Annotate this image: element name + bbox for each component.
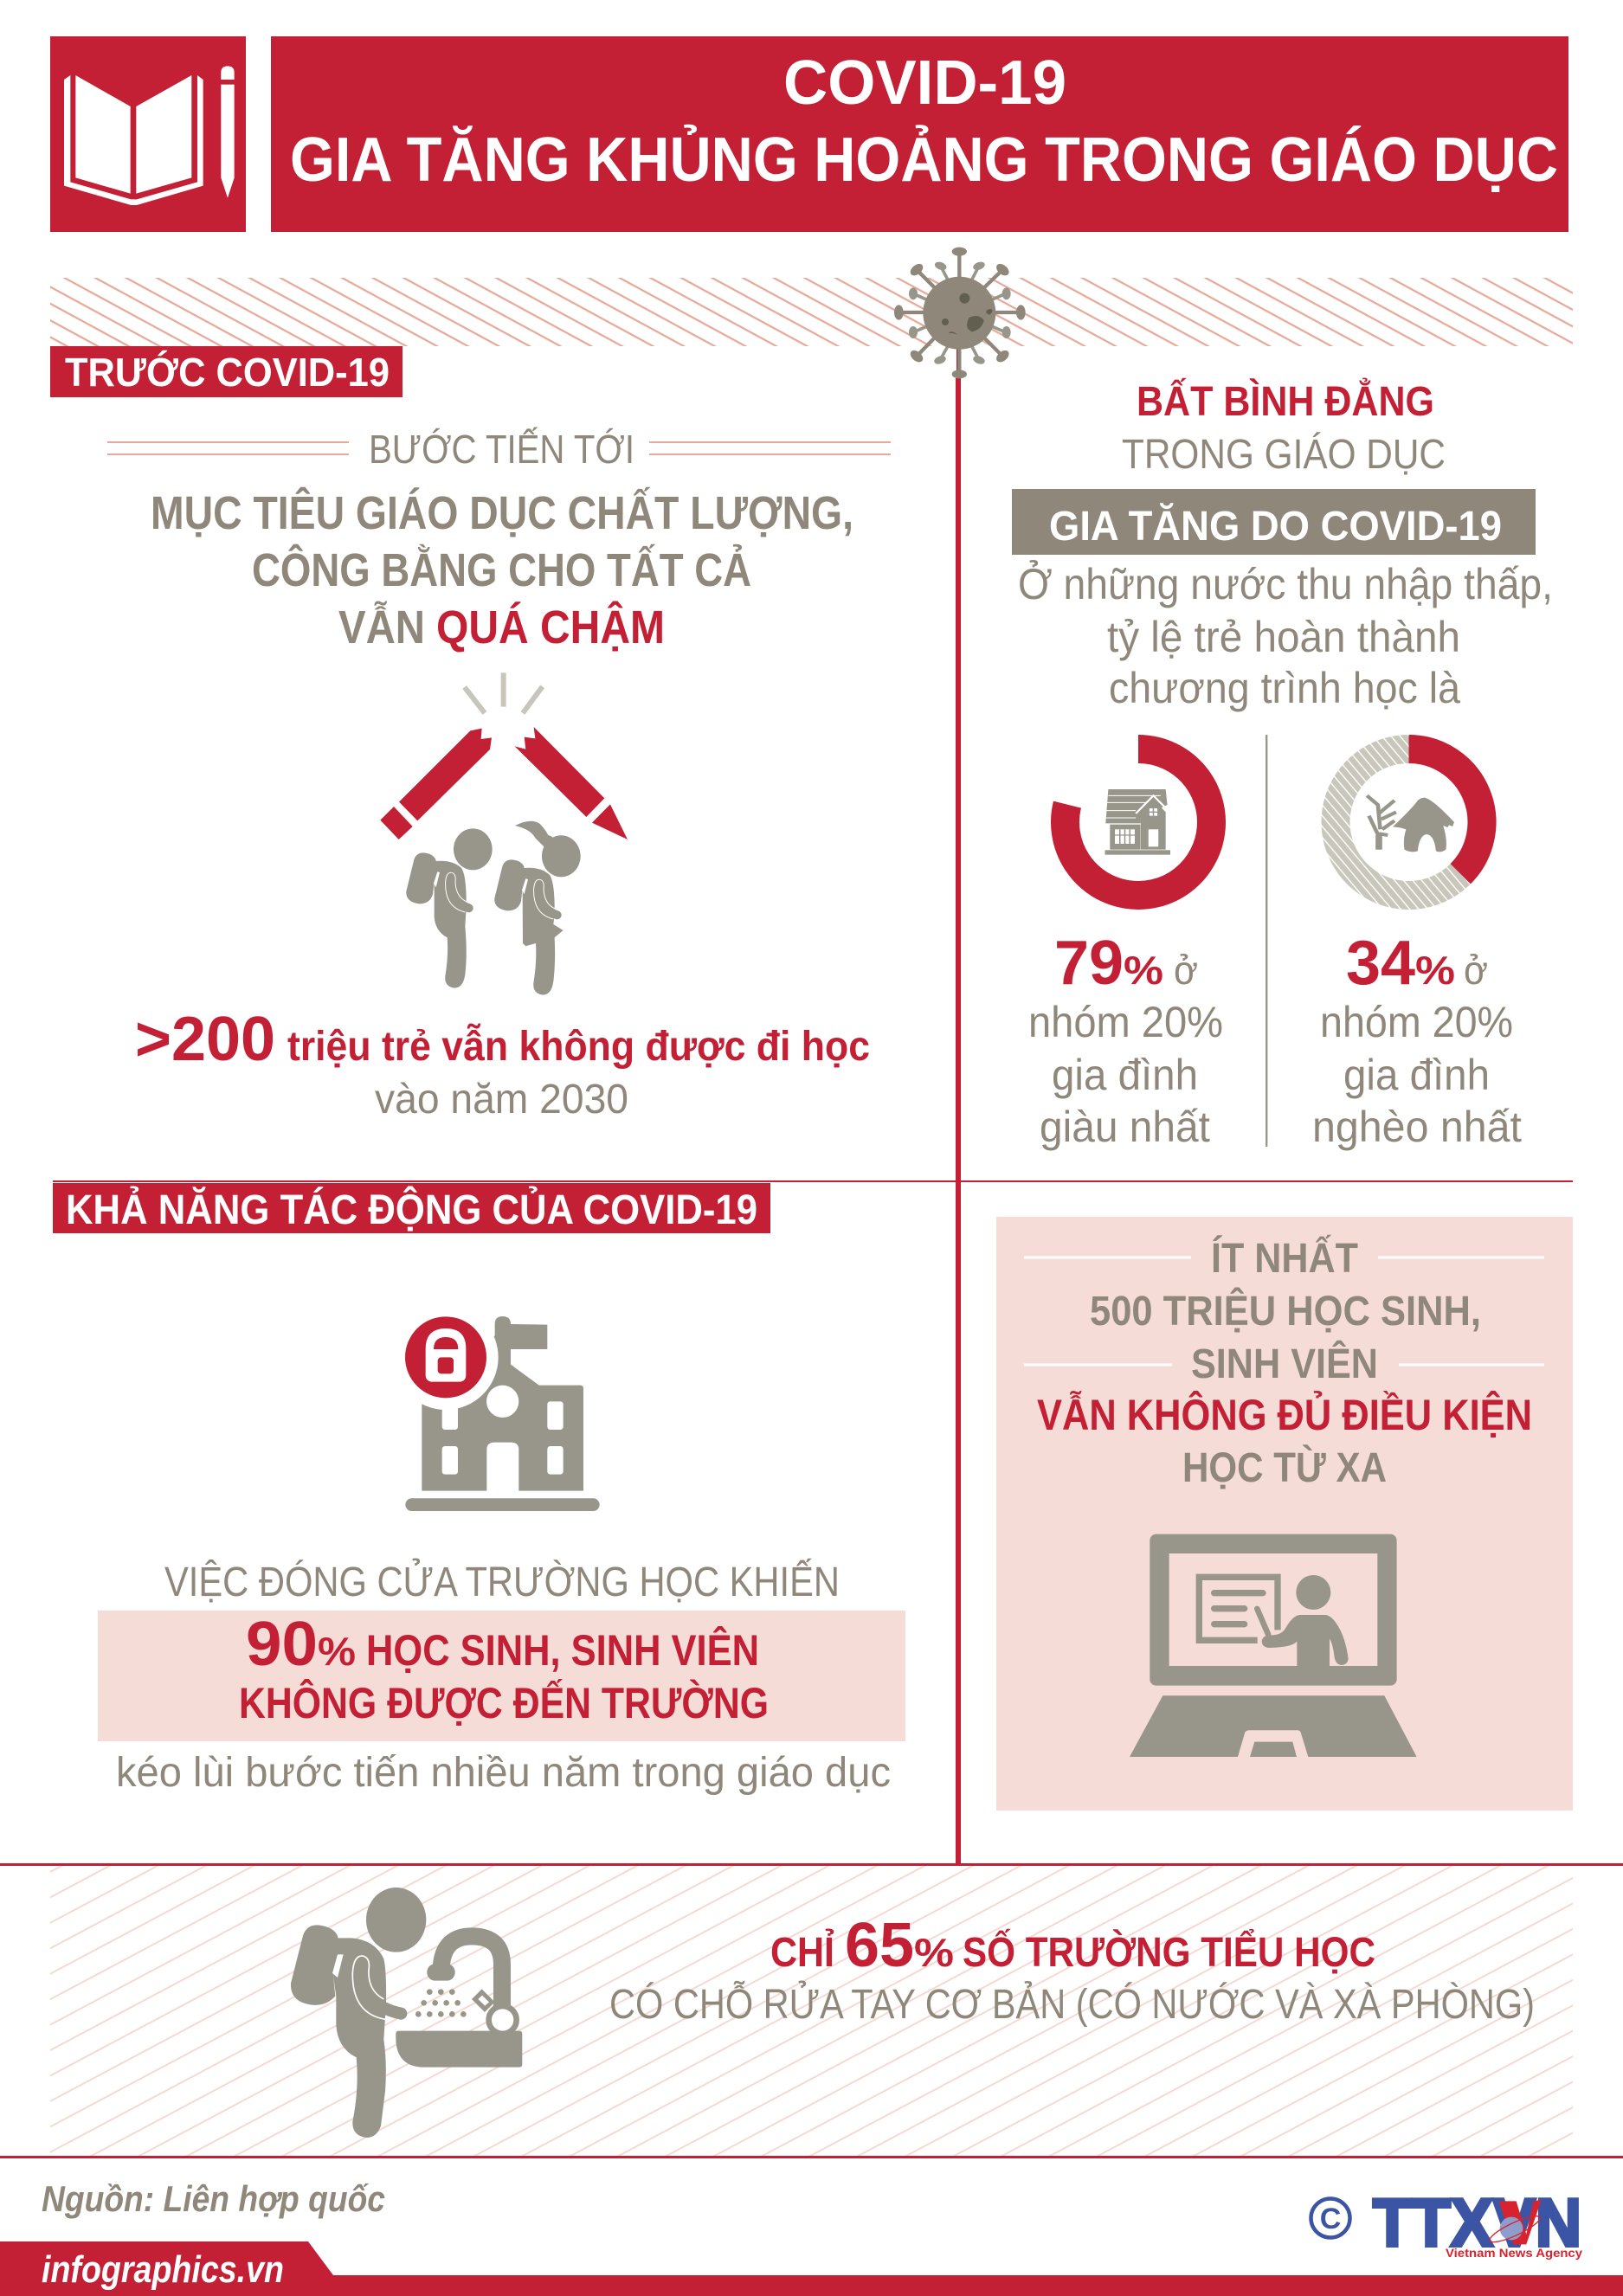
stat: 79 percent: [1028, 929, 1223, 1151]
section label: potential impact of covid: KHẢ NĂNG TÁC ĐỘNG CỦA COVID-19: [66, 1186, 757, 1233]
panel: remote learning: 500 TRIỆU HỌC SINH,: [1090, 1287, 1481, 1335]
heading: quality education goal too slow: QUÁ CHẬM: [436, 601, 665, 653]
grey banner: increased by covid: GIA TĂNG DO COVID-19: [1049, 503, 1502, 550]
central vertical divider: [956, 349, 961, 1864]
stat: 34 percent: nghèo nhất: [1312, 1103, 1522, 1151]
panel: remote learning: SINH VIÊN: [1191, 1340, 1378, 1387]
title banner: [271, 36, 1568, 232]
stat: 79 percent: nhóm 20%: [1028, 998, 1223, 1046]
stat: 200 million children: vào năm 2030: [375, 1077, 628, 1122]
subheading: progress: BƯỚC TIẾN TỚI: [369, 427, 634, 472]
text: school closure lead-in: VIỆC ĐÓNG CỬA TRƯỜNG HỌC KHIẾN: [164, 1558, 840, 1605]
callout: 90 percent of students out of school: KHÔNG ĐƯỢC ĐẾN TRƯỜNG: [239, 1678, 769, 1727]
icon: child washing hands: [291, 1888, 522, 2138]
heading: inequality in education: [1122, 378, 1446, 478]
callout: 90 percent of students out of school: %: [318, 1629, 356, 1674]
logo: TTXVN Vietnam News Agency: C: [1320, 2203, 1341, 2235]
callout: 90 percent of students out of school: HỌC SINH, SINH VIÊN: [366, 1626, 759, 1675]
panel: remote learning: ÍT NHẤT: [1211, 1235, 1358, 1282]
stat: 79 percent: gia đình: [1052, 1051, 1198, 1099]
stat: 200 million children: >200: [135, 1005, 275, 1074]
panel: remote learning: VẪN KHÔNG ĐỦ ĐIỀU KIỆN: [1037, 1390, 1532, 1439]
donut chart: 79 percent richest: [1066, 749, 1212, 895]
heading: quality education goal too slow: [151, 486, 853, 653]
panel: remote learning: [996, 1217, 1573, 1810]
icon: laptop with teacher: [1130, 1534, 1417, 1757]
panel: remote learning: HỌC TỪ XA: [1182, 1444, 1387, 1491]
heading: quality education goal too slow: VẪN: [338, 601, 425, 653]
icon: coronavirus: [894, 248, 1026, 378]
source: Nguồn: Liên hợp quốc: [42, 2178, 385, 2219]
stat: 79 percent: ở: [1174, 948, 1198, 993]
stat: 34 percent: [1312, 929, 1522, 1151]
footer bar: infographics.vn: infographics.vn: [42, 2248, 284, 2291]
callout: 90 percent of students out of school: [98, 1610, 905, 1741]
text: 65 percent of primary schools have handwashing: SỐ TRƯỜNG TIỂU HỌC: [963, 1928, 1375, 1976]
icon: broken pencil and two children: [380, 672, 628, 995]
stat: 200 million children: triệu trẻ vẫn không được đi học: [287, 1023, 870, 1070]
stat: 34 percent: 34: [1346, 929, 1415, 998]
icon: house: [1105, 789, 1170, 855]
header icon: book and pencil: [50, 36, 246, 232]
text: low income countries completion rate: [1018, 559, 1553, 712]
text: 65 percent of primary schools have handwashing: 65: [845, 1911, 914, 1980]
stat: 79 percent: giàu nhất: [1040, 1103, 1210, 1151]
heading: inequality in education: BẤT BÌNH ĐẲNG: [1137, 378, 1434, 425]
stat: 200 million children: [135, 1005, 870, 1122]
donut chart: 34 percent poorest: [1336, 749, 1482, 895]
text: 65 percent of primary schools have handwashing: %: [914, 1930, 954, 1975]
text: low income countries completion rate: chương trình học là: [1109, 664, 1460, 712]
logo: TTXVN Vietnam News Agency: Vietnam News Agency: [1446, 2246, 1582, 2260]
stat: 79 percent: 79: [1054, 929, 1124, 998]
text: setback in education: kéo lùi bước tiến nhiều năm trong giáo dục: [116, 1750, 891, 1796]
callout: 90 percent of students out of school: 90: [246, 1610, 318, 1679]
stat: 34 percent: gia đình: [1343, 1051, 1490, 1099]
section label: before covid: TRƯỚC COVID-19: [65, 350, 390, 395]
text: low income countries completion rate: Ở những nước thu nhập thấp,: [1018, 559, 1553, 608]
text: 65 percent of primary schools have handwashing: CHỈ: [770, 1928, 834, 1976]
logo: TTXVN Vietnam News Agency: TTXVN: [1373, 2184, 1581, 2261]
text: 65 percent of primary schools have handwashing: [609, 1911, 1535, 2028]
stat: 34 percent: ở: [1464, 948, 1488, 993]
stat: 79 percent: %: [1124, 948, 1163, 993]
heading: quality education goal too slow: CÔNG BẰNG CHO TẤT CẢ: [252, 543, 751, 596]
divider between donuts: [1266, 735, 1267, 1147]
grey banner: increased by covid: [1012, 489, 1536, 555]
text: low income countries completion rate: tỷ lệ trẻ hoàn thành: [1107, 613, 1460, 661]
stat: 34 percent: %: [1415, 948, 1455, 993]
icon: closed school with padlock: [393, 1305, 600, 1511]
title banner: GIA TĂNG KHỦNG HOẢNG TRONG GIÁO DỤC: [290, 125, 1558, 195]
heading: quality education goal too slow: MỤC TIÊU GIÁO DỤC CHẤT LƯỢNG,: [151, 486, 853, 539]
heading: inequality in education: TRONG GIÁO DỤC: [1122, 432, 1446, 478]
title banner: COVID-19: [783, 48, 1066, 118]
footer bar: infographics.vn: [0, 2241, 1623, 2296]
icon: hut and bare tree: [1367, 795, 1454, 852]
subheading: progress: [107, 427, 891, 472]
stat: 34 percent: nhóm 20%: [1320, 998, 1513, 1046]
